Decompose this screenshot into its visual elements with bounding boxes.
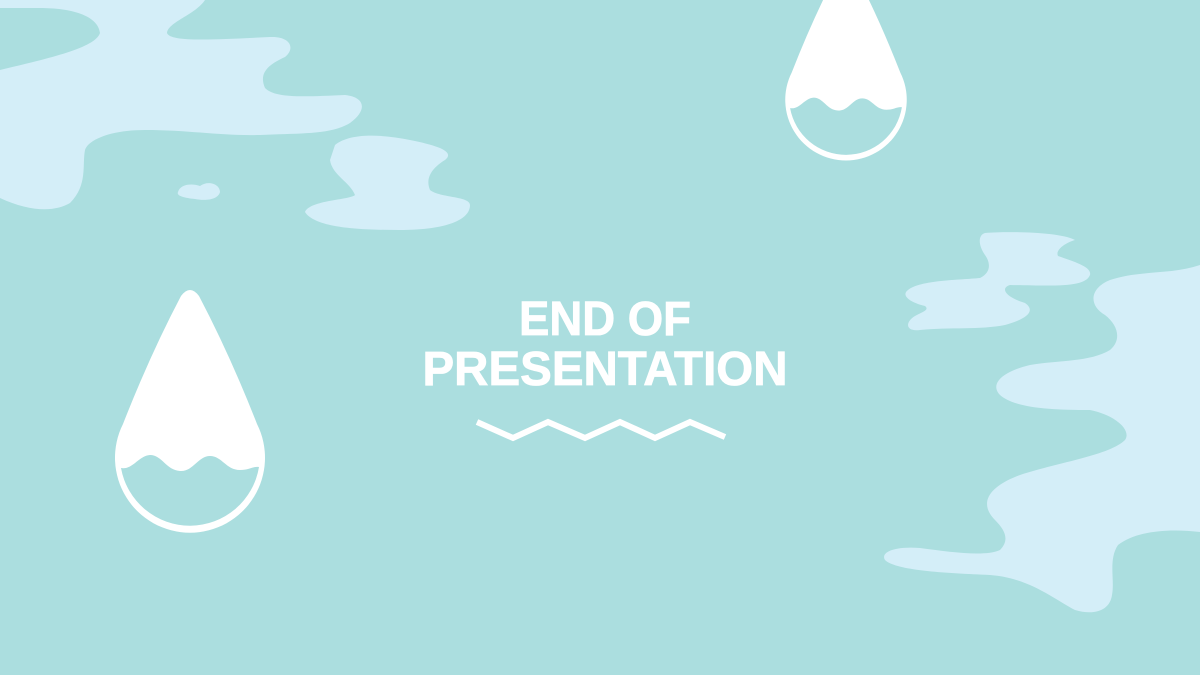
zigzag decoration	[477, 422, 725, 438]
puddle: top-left	[0, 0, 362, 209]
title	[422, 293, 788, 396]
title: PRESENTATION	[422, 343, 788, 396]
icon: water drop top right	[785, 0, 907, 161]
puddle: right large	[884, 265, 1200, 612]
puddle: right upper small	[905, 232, 1090, 330]
title: END OF	[519, 293, 691, 346]
puddle: middle-left	[305, 136, 470, 230]
puddle: small blob	[178, 183, 220, 200]
icon: water drop large	[115, 290, 265, 533]
